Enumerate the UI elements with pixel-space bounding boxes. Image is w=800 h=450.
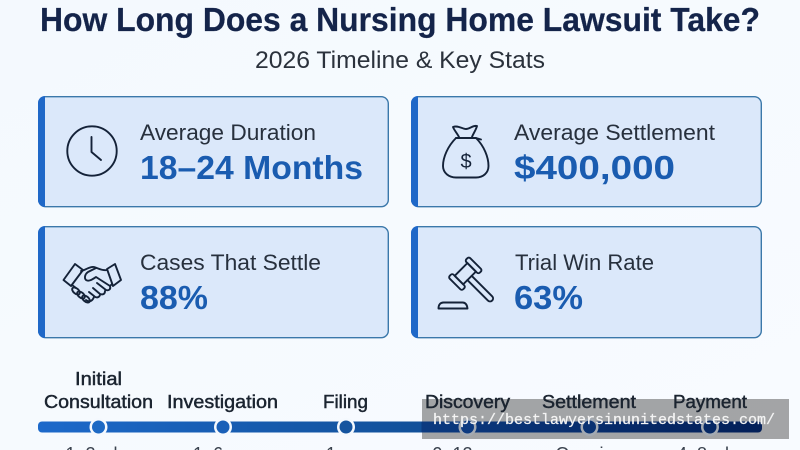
step: filing: Filing <box>323 392 368 412</box>
subtitle: 2026 Timeline & Key Stats <box>255 47 545 74</box>
step: settlement <box>542 392 636 450</box>
timeline <box>38 369 762 450</box>
label: trial win rate: Trial Win Rate <box>515 250 654 275</box>
panel: average duration <box>38 96 388 207</box>
panel: cases that settle <box>38 226 388 338</box>
timeline bar <box>38 422 762 432</box>
icon: gavel <box>438 257 502 311</box>
label: cases that settle: Cases That Settle <box>140 250 321 275</box>
label: average duration: Average Duration <box>140 120 316 145</box>
step: discovery <box>425 392 510 450</box>
value: 18-24 months: 18–24 Months <box>140 149 363 186</box>
step: filing <box>323 392 368 450</box>
value: 88%: 88% <box>140 279 208 316</box>
step: investigation: Investigation <box>167 392 278 412</box>
step: payment <box>673 392 747 450</box>
step: investigation <box>167 392 278 450</box>
value: 63%: 63% <box>514 279 583 316</box>
title: How Long Does a Nursing Home Lawsuit Take? <box>40 1 760 38</box>
step: payment: Payment <box>673 392 747 412</box>
watermark banner <box>422 399 789 439</box>
step: settlement: Settlement <box>542 392 636 412</box>
icon: money bag <box>443 126 488 178</box>
step: initial consultation: Consultation <box>44 392 153 412</box>
label: average settlement: Average Settlement <box>514 120 715 145</box>
step: initial consultation <box>44 369 153 450</box>
panel: trial win rate <box>411 226 761 338</box>
step: initial consultation: Initial <box>75 369 122 389</box>
icon: money bag: $ <box>460 151 472 173</box>
panel: average settlement <box>411 96 761 207</box>
value: $400,000: $400,000 <box>514 149 675 186</box>
step: discovery: Discovery <box>425 392 510 412</box>
icon: clock <box>67 126 117 176</box>
watermark url: https://bestlawyersinunitedstates.com/ <box>433 412 775 429</box>
icon: handshake <box>64 264 121 304</box>
